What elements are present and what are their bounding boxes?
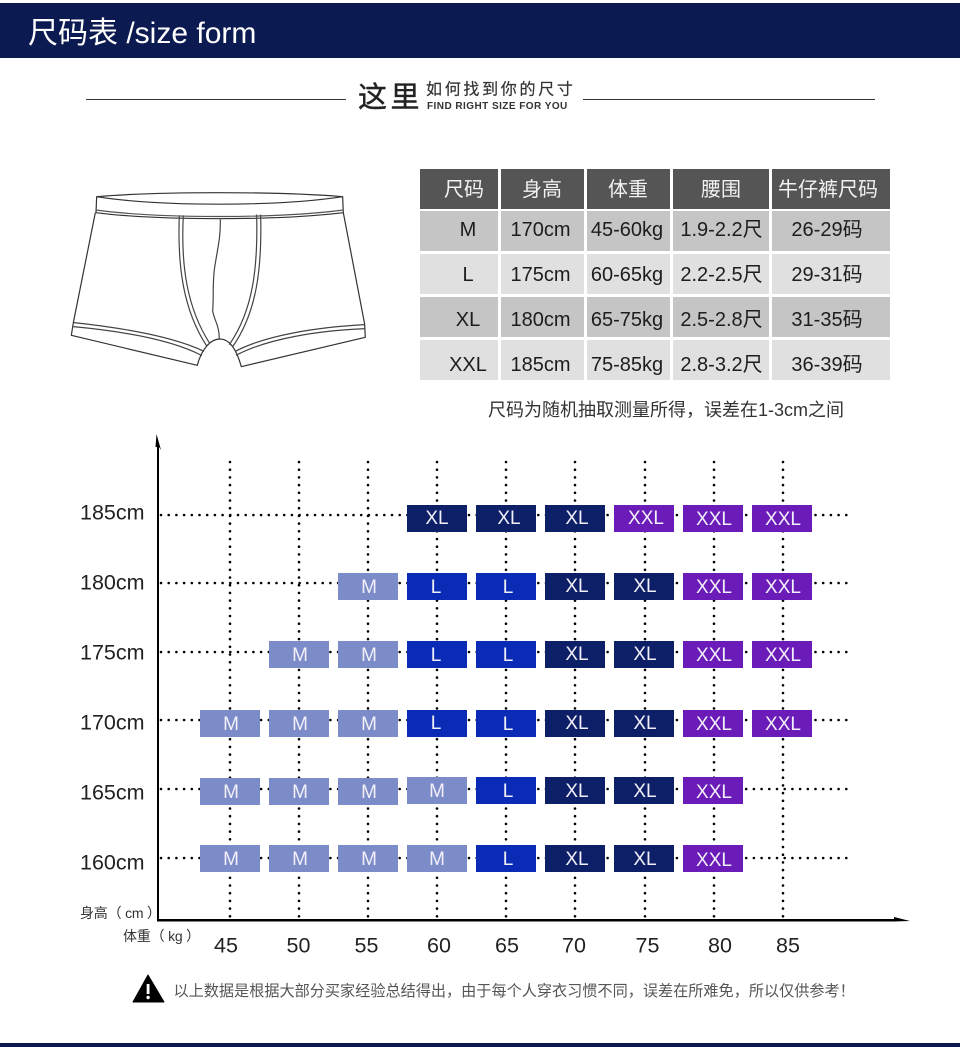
table row: M: 170cm (510, 219, 571, 241)
row 175cm size bars (269, 641, 812, 668)
table row: L: 175cm (510, 264, 571, 286)
table row: XL: 180cm (510, 309, 571, 331)
row 175cm size bars: XXL (696, 645, 732, 666)
row 170cm size bars: L (431, 713, 441, 734)
row 180cm size bars: L (503, 577, 513, 598)
table row: XXL: 185cm (510, 354, 571, 376)
row 170cm size bars: M (223, 714, 239, 735)
row 175cm size bars: L (503, 645, 513, 666)
height axis labels: 165cm (80, 780, 145, 804)
section heading: how to find your size: 这里 (358, 81, 423, 114)
row 180cm size bars: M (361, 577, 377, 598)
table row: M: 26-29码 (791, 219, 863, 241)
section heading: how to find your size (86, 80, 875, 114)
row 175cm size bars: XXL (765, 645, 801, 666)
height axis labels: 170cm (80, 710, 145, 734)
row 170cm size bars (200, 710, 812, 737)
weight axis labels: 70 (562, 934, 586, 958)
row 165cm size bars: M (429, 781, 445, 802)
row 170cm size bars: XXL (765, 714, 801, 735)
weight axis labels (214, 934, 800, 958)
row 165cm size bars: M (223, 782, 239, 803)
row 180cm size bars: L (431, 577, 441, 598)
row 160cm size bars: M (223, 849, 239, 870)
row 165cm size bars: M (292, 782, 308, 803)
row 180cm size bars: XXL (765, 577, 801, 598)
row 160cm size bars: M (292, 849, 308, 870)
table row: M: 1.9-2.2尺 (680, 219, 763, 241)
table row: XL: XL (456, 309, 480, 331)
height axis labels: 185cm (80, 500, 145, 524)
row 165cm size bars: XL (633, 781, 657, 802)
row 185cm size bars: XL (565, 508, 589, 529)
section heading: how to find your size: 如何找到你的尺寸 (426, 80, 576, 98)
table row: XL (420, 297, 890, 337)
row 175cm size bars: L (431, 645, 441, 666)
table row: XL: 65-75kg (591, 309, 663, 331)
weight axis labels: 60 (427, 934, 451, 958)
table row: L (420, 254, 890, 294)
weight axis labels: 65 (495, 934, 519, 958)
illustration: boxer briefs outline (71, 193, 365, 367)
row 165cm size bars: XXL (696, 782, 732, 803)
row 180cm size bars: XXL (696, 577, 732, 598)
row 170cm size bars: XL (565, 713, 589, 734)
row 165cm size bars: XL (565, 781, 589, 802)
table row: M: M (460, 219, 476, 241)
horizontal axis arrow (157, 917, 910, 922)
row 170cm size bars: XL (633, 713, 657, 734)
table row: XXL: 2.8-3.2尺 (680, 354, 763, 376)
table row: XL: 2.5-2.8尺 (680, 309, 763, 331)
row 180cm size bars: XL (565, 576, 589, 597)
table row: L: L (462, 264, 474, 286)
table header row: 腰围 (701, 179, 741, 201)
height axis labels: 160cm (80, 850, 145, 874)
chart dotted grid (161, 462, 852, 917)
row 175cm size bars: M (292, 645, 308, 666)
table row: XXL: 75-85kg (591, 354, 663, 376)
weight axis labels: 80 (708, 934, 732, 958)
weight axis labels: 85 (776, 934, 800, 958)
disclaimer note: 以上数据是根据大部分买家经验总结得出，由于每个人穿衣习惯不同，误差在所难免，所以仅供参考！ (174, 983, 855, 1000)
row 185cm size bars: XXL (696, 509, 732, 530)
table row: XXL (420, 340, 890, 380)
row 185cm size bars (407, 505, 812, 532)
row 160cm size bars: XL (633, 849, 657, 870)
weight axis labels: 50 (287, 934, 310, 958)
height axis labels: 180cm (80, 570, 145, 594)
row 160cm size bars: XXL (696, 850, 732, 871)
row 170cm size bars: L (503, 714, 513, 735)
weight axis labels: 55 (355, 934, 378, 958)
title banner: 尺码表 /size form (28, 17, 256, 50)
height axis title: 身高（ cm ） (80, 905, 161, 921)
table header row: 牛仔裤尺码 (778, 178, 878, 201)
row 170cm size bars: XXL (696, 714, 732, 735)
row 165cm size bars (200, 777, 743, 805)
row 160cm size bars: XL (565, 849, 589, 870)
vertical axis arrow (156, 434, 161, 920)
table row: XL: 31-35码 (791, 309, 863, 331)
row 160cm size bars: L (503, 849, 513, 870)
table row: XXL: 36-39码 (791, 354, 863, 376)
footer bar (0, 1043, 960, 1047)
height axis labels (80, 500, 145, 874)
section heading: how to find your size: FIND RIGHT SIZE FOR YOU (427, 101, 568, 112)
row 185cm size bars: XL (425, 508, 449, 529)
weight axis labels: 45 (214, 934, 238, 958)
table row: L: 60-65kg (591, 264, 663, 286)
row 185cm size bars: XXL (628, 508, 664, 529)
row 180cm size bars (338, 573, 812, 600)
row 185cm size bars: XL (497, 508, 521, 529)
weight axis labels: 75 (636, 934, 659, 958)
size table (420, 169, 890, 380)
title banner (0, 3, 960, 58)
table header row (420, 169, 890, 209)
table header row: 体重 (608, 178, 648, 201)
table header row: 尺码 (444, 179, 484, 201)
row 160cm size bars: M (361, 849, 377, 870)
table row: L: 29-31码 (791, 264, 863, 286)
table header row: 身高 (522, 178, 562, 201)
row 175cm size bars: XL (633, 644, 657, 665)
row 185cm size bars: XXL (765, 509, 801, 530)
table row: XXL: XXL (449, 354, 487, 376)
row 165cm size bars: M (361, 782, 377, 803)
table note: 尺码为随机抽取测量所得，误差在1-3cm之间 (488, 400, 844, 420)
table row: M: 45-60kg (591, 219, 663, 241)
row 165cm size bars: L (503, 781, 513, 802)
row 160cm size bars: M (429, 849, 445, 870)
table row: M (420, 211, 890, 251)
weight axis title: 体重（ kg ） (123, 928, 200, 944)
row 160cm size bars (200, 845, 743, 872)
row 170cm size bars: M (292, 714, 308, 735)
row 170cm size bars: M (361, 714, 377, 735)
height and weight size chart (80, 434, 910, 958)
table row: L: 2.2-2.5尺 (680, 264, 763, 286)
row 175cm size bars: M (361, 645, 377, 666)
height axis labels: 175cm (80, 640, 145, 664)
row 175cm size bars: XL (565, 644, 589, 665)
row 180cm size bars: XL (633, 576, 657, 597)
icon: warning triangle (133, 975, 164, 1002)
